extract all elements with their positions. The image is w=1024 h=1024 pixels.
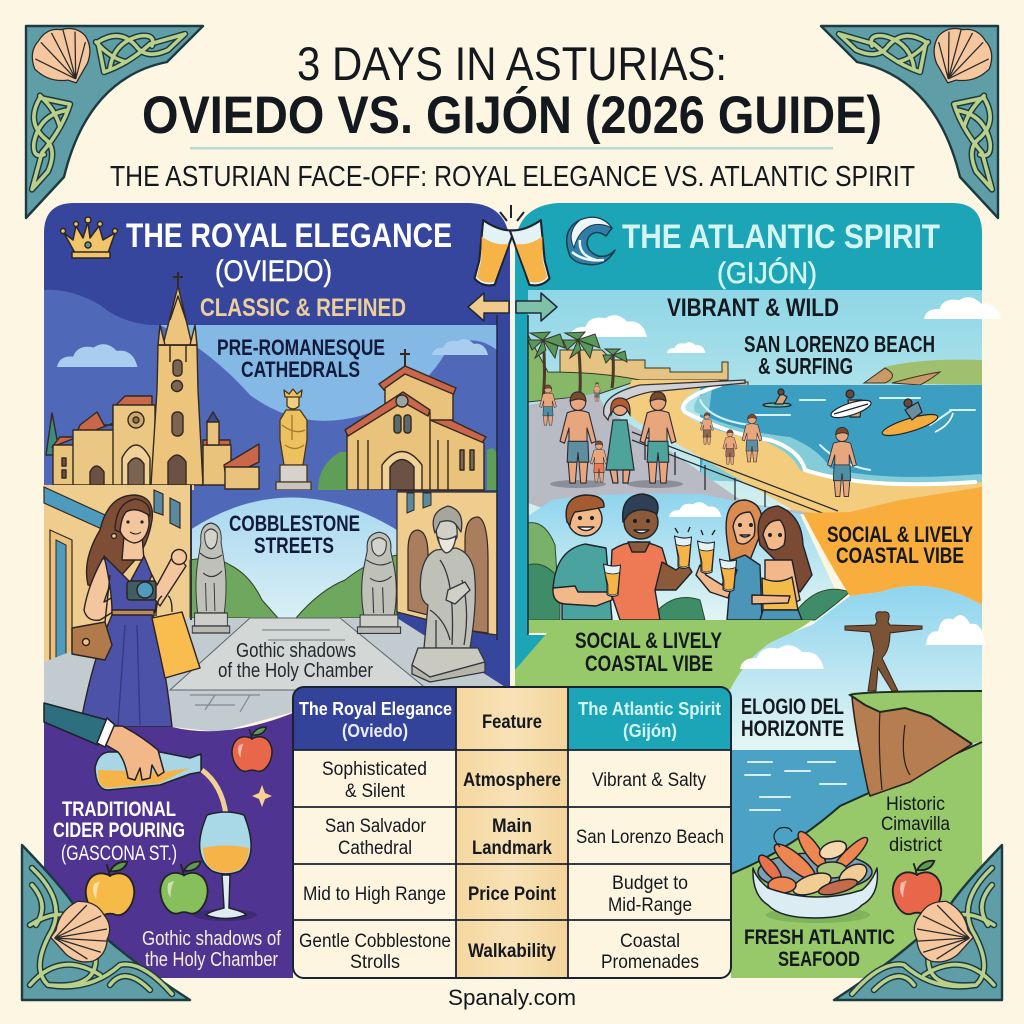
icon: red apple — [232, 727, 272, 771]
caption: Cimavilla: Historic — [886, 794, 945, 815]
panel: cider pouring — [44, 703, 293, 978]
label: San Lorenzo: SAN LORENZO BEACH — [744, 331, 935, 357]
title: 3 DAYS IN ASTURIAS: — [297, 37, 727, 90]
orange callout area — [803, 487, 982, 605]
icon: yellow apple — [86, 862, 134, 915]
buildings and palms — [528, 332, 982, 402]
row: main landmark: Main — [492, 816, 532, 837]
beachgoers — [540, 382, 856, 497]
corner ornament: top right — [821, 25, 998, 218]
label: orange social vibe: COASTAL VIBE — [836, 543, 964, 568]
scene: Elogio del Horizonte — [730, 586, 986, 978]
title: OVIEDO VS. GIJÓN (2026 GUIDE) — [142, 85, 882, 145]
figure: woman with camera and shopping bag — [72, 495, 200, 727]
title — [142, 37, 882, 145]
label: Elogio: HORIZONTE — [741, 716, 844, 741]
heading: Oviedo — [126, 217, 452, 322]
scene: cobblestone street — [44, 485, 510, 732]
icon: glass of cider — [193, 812, 257, 921]
row: main landmark: Landmark — [472, 838, 552, 859]
table header: Feature — [482, 712, 542, 733]
panel: Gijón atlantic spirit — [515, 203, 1001, 978]
table header: The Royal Elegance — [299, 698, 452, 719]
row: atmosphere: & Silent — [345, 781, 406, 802]
heading: Oviedo: (OVIEDO) — [215, 255, 332, 288]
caption: Gothic shadows cider: the Holy Chamber — [145, 949, 278, 971]
footer: Spanaly.com — [448, 985, 576, 1010]
row: walkability — [299, 931, 699, 973]
label: orange social vibe — [827, 522, 973, 568]
label: Pre-Romanesque — [217, 335, 385, 382]
label: Cobblestone: STREETS — [254, 533, 334, 558]
icon: red apple (Gijón) — [893, 861, 941, 914]
caption: Cimavilla: district — [889, 835, 943, 856]
scene: San Lorenzo beach — [528, 290, 1001, 516]
surfers — [763, 389, 953, 440]
statue: left figure — [192, 523, 230, 633]
row: atmosphere: Sophisticated — [322, 759, 427, 780]
building: San Salvador cathedral — [46, 272, 259, 489]
caption: Gothic shadows street — [218, 640, 373, 682]
label: Elogio — [741, 694, 844, 741]
label: green social vibe: COASTAL VIBE — [585, 651, 713, 676]
label: San Lorenzo: & SURFING — [758, 353, 853, 379]
label: cider: CIDER POURING — [53, 819, 185, 842]
row: price point: Price Point — [468, 884, 557, 905]
corner ornament: bottom right — [834, 845, 1002, 1000]
row: main landmark: San Lorenzo Beach — [576, 827, 724, 848]
divider gap — [510, 280, 515, 670]
row: walkability: Coastal — [620, 931, 680, 952]
row: price point — [303, 873, 692, 916]
heading: Gijón — [622, 218, 940, 322]
label: Cobblestone — [229, 511, 360, 558]
label: San Lorenzo — [744, 331, 935, 379]
heading: Gijón: VIBRANT & WILD — [667, 294, 839, 322]
statue: bearded saint — [412, 506, 485, 682]
icon: crown — [60, 217, 118, 258]
scene: Oviedo sky and cathedrals — [44, 272, 497, 490]
row: main landmark — [325, 816, 724, 859]
caption: Gothic shadows street: of the Holy Chamber — [218, 660, 373, 682]
caption: Cimavilla — [881, 794, 950, 856]
row: walkability: Strolls — [350, 952, 400, 973]
row: main landmark: Cathedral — [338, 838, 412, 859]
table header: (Oviedo) — [342, 720, 408, 741]
label: seafood: SEAFOOD — [778, 948, 860, 971]
statue: golden king — [276, 389, 311, 490]
icon: hand and sleeve pouring — [44, 703, 201, 790]
title divider — [190, 147, 833, 150]
green callout area — [515, 620, 812, 690]
label: Elogio: ELOGIO DEL — [741, 694, 844, 719]
panel: Oviedo royal elegance — [44, 203, 510, 732]
caption: Gothic shadows street: Gothic shadows — [236, 640, 356, 662]
arrow: two-way comparison — [468, 293, 557, 640]
table header: The Atlantic Spirit — [578, 698, 721, 719]
subtitle: THE ASTURIAN FACE-OFF: ROYAL ELEGANCE VS. ATLANTIC SPIRIT — [110, 161, 915, 193]
row: atmosphere: Vibrant & Salty — [592, 770, 706, 791]
label: Pre-Romanesque: CATHEDRALS — [241, 357, 360, 382]
heading: Gijón: THE ATLANTIC SPIRIT — [622, 218, 940, 256]
row: price point: Mid to High Range — [303, 884, 446, 905]
row: walkability: Promenades — [601, 952, 699, 973]
label: orange social vibe: SOCIAL & LIVELY — [827, 522, 973, 547]
label: cider — [53, 798, 185, 865]
label: cider: (GASCONA ST.) — [61, 842, 177, 865]
scene: friends toasting — [528, 494, 850, 620]
sea and sand — [700, 385, 982, 490]
sculpture — [845, 612, 922, 691]
corner ornament: bottom left — [22, 845, 190, 1000]
heading: Gijón: (GIJÓN) — [717, 257, 817, 290]
row: price point: Budget to — [612, 873, 688, 894]
row: atmosphere: Atmosphere — [463, 770, 561, 791]
row: walkability: Walkability — [468, 941, 556, 962]
icon: sparkle — [252, 785, 272, 807]
label: seafood: FRESH ATLANTIC — [744, 926, 895, 949]
label: seafood — [744, 926, 895, 971]
comparison table — [293, 687, 731, 978]
label: green social vibe: SOCIAL & LIVELY — [575, 628, 722, 653]
building: pre-romanesque church — [318, 349, 497, 490]
label: Cobblestone: COBBLESTONE — [229, 511, 360, 536]
icon: green apple — [160, 862, 208, 914]
label: cider: TRADITIONAL — [62, 798, 176, 821]
stream — [202, 770, 226, 850]
promenade and railing — [528, 393, 820, 514]
caption: Cimavilla: Cimavilla — [881, 814, 950, 835]
caption: Gothic shadows cider — [142, 928, 281, 971]
label: Pre-Romanesque: PRE-ROMANESQUE — [217, 335, 385, 360]
statue: centre figure — [357, 532, 401, 633]
table header — [299, 698, 721, 741]
caption: Gothic shadows cider: Gothic shadows of — [142, 928, 281, 950]
row: main landmark: San Salvador — [325, 816, 427, 837]
row: price point: Mid-Range — [608, 895, 692, 916]
icon: clinking beer glasses — [467, 205, 557, 289]
row: walkability: Gentle Cobblestone — [299, 931, 451, 952]
seafood bowl — [753, 828, 877, 923]
corner ornament: top left — [26, 25, 203, 218]
table header: (Gijón) — [623, 720, 677, 741]
label: green social vibe — [575, 628, 722, 676]
heading: Oviedo: CLASSIC & REFINED — [200, 294, 406, 322]
icon: wave — [567, 217, 615, 265]
row: atmosphere — [322, 759, 706, 802]
heading: Oviedo: THE ROYAL ELEGANCE — [126, 217, 452, 255]
